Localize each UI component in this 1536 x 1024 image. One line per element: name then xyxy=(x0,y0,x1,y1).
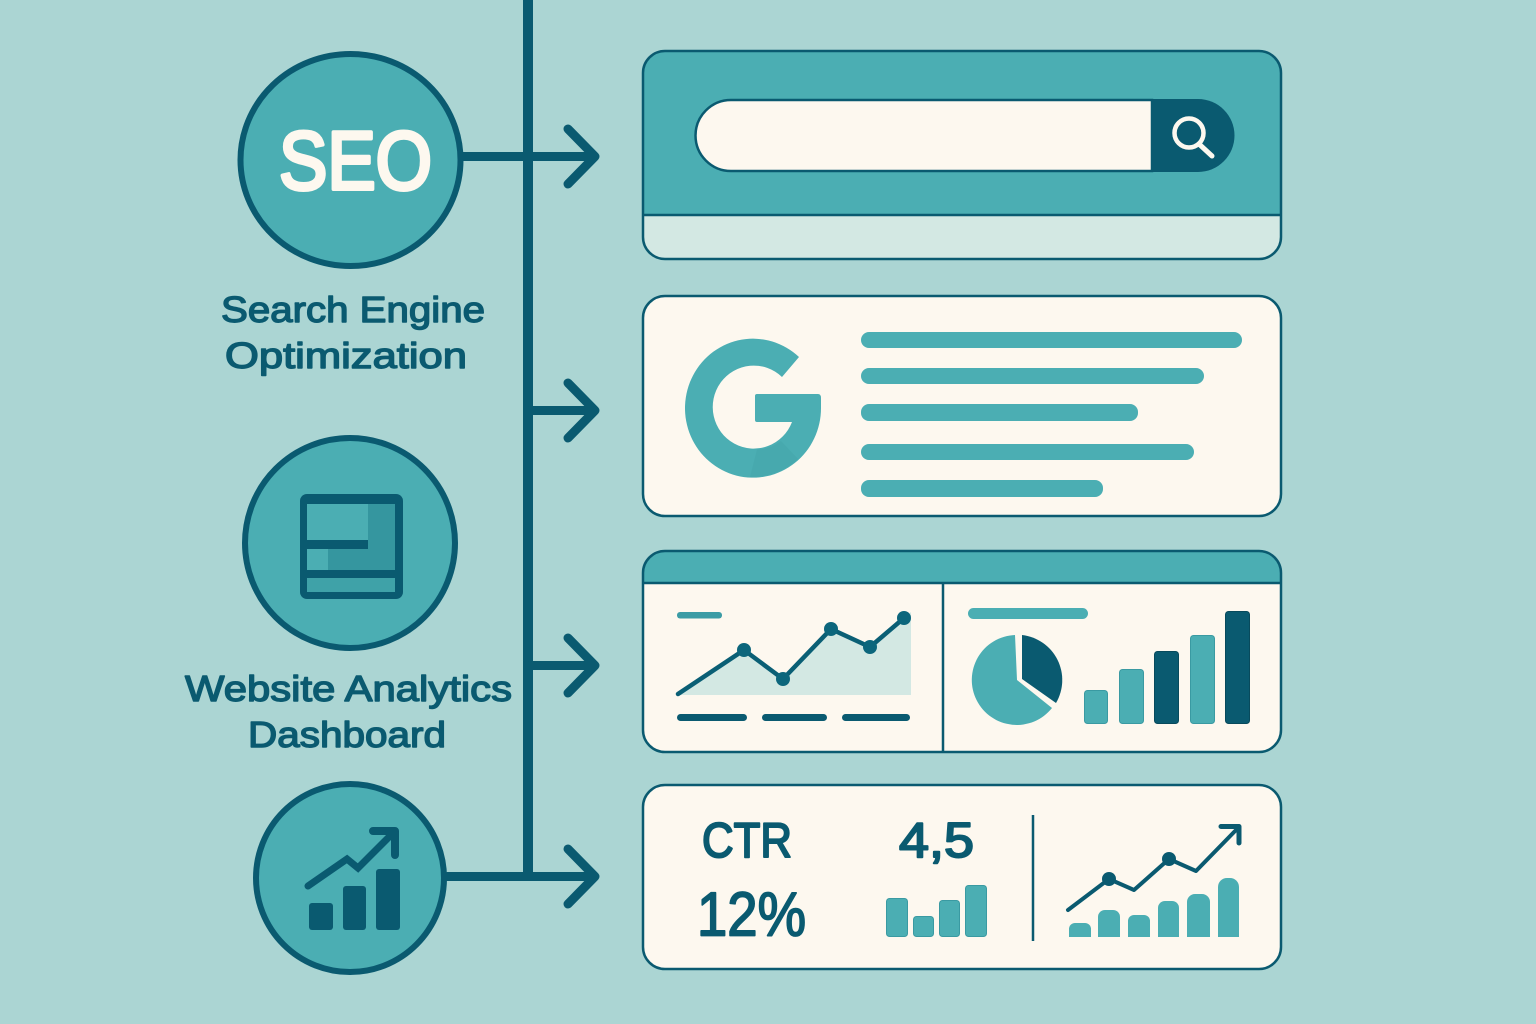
line chart xyxy=(677,611,911,721)
icon: magnifying glass xyxy=(1174,118,1212,156)
arrow: SEO to search panel xyxy=(463,129,595,184)
search button xyxy=(1151,99,1234,172)
arrow: growth to metrics panel xyxy=(447,849,595,904)
arrow: to dashboard panel xyxy=(530,638,595,693)
panel: metrics xyxy=(643,785,1281,969)
icon: letter G logo xyxy=(685,339,821,478)
SEO badge: SEO xyxy=(279,114,432,207)
result text lines xyxy=(861,332,1242,497)
panel: search bar xyxy=(643,51,1281,259)
dashboard header bar xyxy=(643,551,1281,583)
metric: CTR: CTR xyxy=(702,814,792,868)
icon: growth bars and arrow xyxy=(308,831,400,930)
panel: search result xyxy=(643,296,1281,516)
metric: 12%: 12% xyxy=(697,880,806,950)
small bar chart xyxy=(886,886,986,936)
label: Website Analytics Dashboard: Website Analytics xyxy=(185,668,512,709)
bar chart xyxy=(1084,612,1250,724)
arrow: to results panel xyxy=(530,383,595,438)
label: Search Engine Optimization xyxy=(221,289,485,376)
metric: 4,5: 4,5 xyxy=(899,814,974,868)
SEO badge xyxy=(240,54,460,266)
label: Website Analytics Dashboard: Dashboard xyxy=(248,714,446,755)
vertical connector line xyxy=(523,0,533,881)
search input field xyxy=(696,100,1152,171)
label: Search Engine Optimization: Search Engine xyxy=(221,289,485,330)
label: Website Analytics Dashboard xyxy=(185,668,512,755)
panel: analytics dashboard xyxy=(643,551,1281,752)
growth badge xyxy=(256,784,444,972)
growth chart with arrow xyxy=(1068,826,1239,937)
icon: dashboard layout xyxy=(300,494,403,599)
analytics badge xyxy=(245,438,455,648)
pie chart xyxy=(968,608,1088,725)
label: Search Engine Optimization: Optimization xyxy=(225,335,467,376)
